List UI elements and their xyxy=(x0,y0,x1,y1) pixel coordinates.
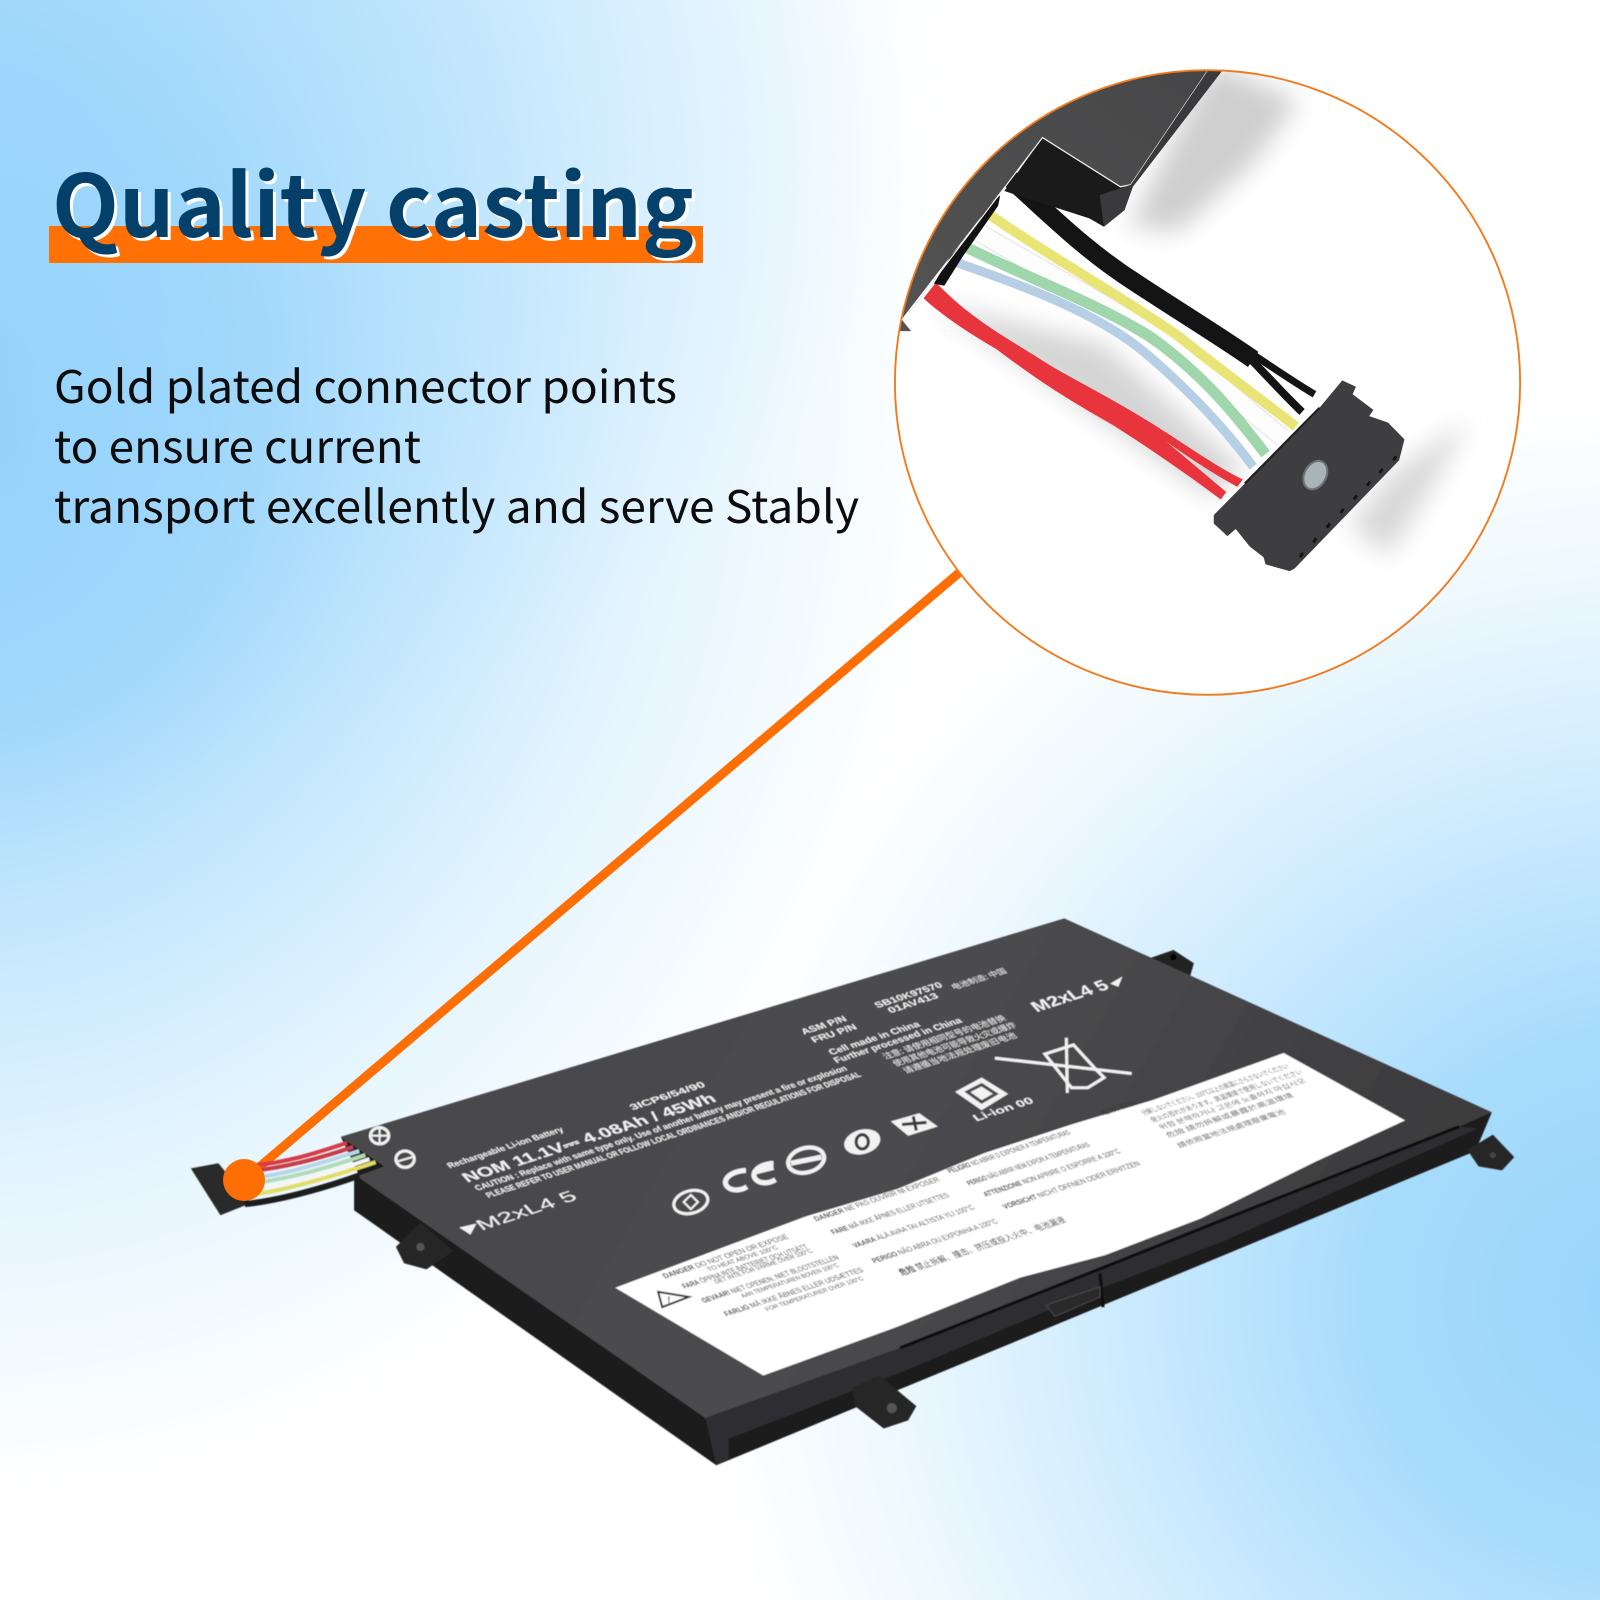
icon: round mark xyxy=(671,1187,710,1217)
description text xyxy=(54,351,859,536)
label warning text: ATTENZIONE NON APRIRE O ESPORRE A 100°C xyxy=(981,1148,1123,1199)
callout dot on connector xyxy=(223,1159,265,1201)
text on battery top: 使用其他电池可能导致火灾或爆炸 xyxy=(890,1020,1019,1069)
text on battery top: 注意: 请使用相同型号的电池替换 xyxy=(879,1013,1009,1062)
label warning text: 発火の恐れがあります。高温環境で使用しないでください xyxy=(1147,1067,1305,1124)
wires xyxy=(924,179,1315,500)
label warning text: DET INTE FÖR VÄRME ÖVER 100°C xyxy=(712,1247,814,1285)
icon: square recycling xyxy=(891,1113,938,1136)
text on battery top: M2xL4 5 xyxy=(471,1187,581,1234)
battery side wall xyxy=(354,1112,1492,1465)
connector xyxy=(1214,380,1404,571)
tab: right xyxy=(1467,1135,1514,1170)
soft photo shadows xyxy=(934,63,1469,555)
icon: CE mark xyxy=(725,1163,776,1190)
label warning text: AAN TEMPERATUREN BOVEN 100°C xyxy=(739,1262,841,1299)
label warning text: 請依照當地法規處理廢棄電池 xyxy=(1174,1107,1288,1150)
wire: blue xyxy=(948,260,1253,467)
wire: black xyxy=(1010,179,1315,412)
label warning text: 危險 請勿拆解或暴露於高溫環境 xyxy=(1163,1090,1296,1140)
description text: to ensure current xyxy=(54,411,421,476)
icon: filled badge xyxy=(841,1125,883,1158)
label warning text: VORSICHT NICHT ÖFFNEN ODER ERHITZEN xyxy=(1000,1160,1142,1211)
label warning text: 위험 분해하거나 고온에 노출하지 마십시오 xyxy=(1155,1076,1308,1131)
battery top surface xyxy=(341,918,1492,1418)
text on battery top: SB10K97570 xyxy=(872,980,945,1010)
label warning text: FARE MÅ IKKE ÅPNES ELLER UTSETTES xyxy=(828,1191,952,1236)
label warning text: 分解しないでください。100°C以上の高温にさらさないでください xyxy=(1138,1061,1291,1117)
ribbon cable xyxy=(245,1143,376,1204)
label warning text: TO HEAT ABOVE 100°C xyxy=(705,1244,780,1273)
label warning text: PELIGRO NO ABRIR O EXPONER A TEMPERATURAS xyxy=(946,1129,1073,1175)
description text: transport excellently and serve Stably xyxy=(54,471,859,536)
text on battery top: 3ICP6/54/90 xyxy=(627,1080,708,1112)
label warning text: PERIGO NÃO ABRIR NEM EXPOR A TEMPERATURAS xyxy=(964,1140,1092,1187)
title text: Quality casting xyxy=(52,137,694,262)
text on battery top: M2xL4 5 xyxy=(1026,976,1113,1015)
wire: white xyxy=(973,229,1282,437)
icon: plus terminal xyxy=(370,1128,389,1144)
text on battery top: ASM P/N xyxy=(798,1014,849,1036)
title highlight bar xyxy=(49,226,703,263)
certification symbols xyxy=(370,1038,1132,1217)
title xyxy=(49,137,703,263)
label warning text: 危険 警告 xyxy=(1097,1097,1140,1117)
tab: left xyxy=(396,1222,453,1269)
text on battery top: 01AV413 xyxy=(885,991,941,1015)
wire: red xyxy=(924,282,1243,500)
icon: recycling xyxy=(955,1078,1008,1110)
text on battery top: FRU P/N xyxy=(808,1022,859,1045)
text on battery top: Li-ion 00 xyxy=(970,1095,1037,1123)
text on battery top: CAUTION : Replace with same type only. Use of another battery may present a fire or explosion xyxy=(473,1065,850,1193)
label warning text: PERIGO NÃO ABRA OU EXPONHA A 100°C xyxy=(869,1217,1000,1265)
wire connector xyxy=(191,1163,251,1215)
label warning text: FARA ÖPPNA INTE BATTERIET OCH UTSÄTT xyxy=(680,1243,811,1291)
label warning text: 危险 禁止拆解、撞击、挤压或投入火中、电池漏液 xyxy=(895,1214,1069,1278)
wire: yellow xyxy=(986,212,1296,427)
text on battery top: 请遵循当地法规处理废旧电池 xyxy=(900,1030,1020,1076)
battery illustration xyxy=(191,918,1514,1465)
belly wrinkle and clip xyxy=(900,1127,1459,1348)
label warning text: FARLIG MÅ IKKE ÅBNES ELLER UDSÆTTES xyxy=(721,1266,866,1318)
description text: Gold plated connector points xyxy=(54,351,677,416)
text on battery top: Further processed in China xyxy=(831,1016,965,1065)
text on battery top: Cell made in China xyxy=(826,1019,923,1057)
text on battery top: NOM 11.1V⎓ 4.08Ah / 45Wh xyxy=(458,1091,720,1186)
circle outline xyxy=(895,70,1520,695)
icon: crossed out bin xyxy=(995,1038,1132,1093)
white warning label xyxy=(615,1053,1405,1375)
connector rivet xyxy=(1302,460,1328,490)
label warning text: FOR TEMPERATURER OVER 100°C xyxy=(763,1275,865,1312)
text on battery top: Rechargeable Li-ion Battery xyxy=(445,1126,567,1170)
magnified connector circle xyxy=(894,69,1522,696)
icon: minus terminal xyxy=(396,1151,414,1167)
label warning text: VAARA ÄLÄ AVAA TAI ALTISTA YLI 100°C xyxy=(850,1203,977,1250)
label warning icon: ! xyxy=(667,1295,670,1305)
battery plate xyxy=(900,71,1222,332)
orange leader line xyxy=(244,572,960,1180)
label warning text: DANGER NE PAS OUVRIR NI EXPOSER xyxy=(812,1176,942,1223)
icon: circle with bar xyxy=(785,1144,827,1177)
mounting tabs xyxy=(396,954,1514,1429)
wire: green xyxy=(961,244,1266,454)
tab: bottom xyxy=(852,1375,916,1429)
label warning text: DANGER DO NOT OPEN OR EXPOSE xyxy=(661,1233,791,1280)
text on battery top: 电池制造: 中国 xyxy=(948,966,1010,992)
label warning text: GEVAAR! NIET OPENEN, NIET BLOOTSTELLEN xyxy=(700,1254,841,1305)
text on battery top: PLEASE REFER TO USER MANUAL OR FOLLOW LOCAL ORDINANCES AND/OR REGULATIONS FOR DISPOSAL xyxy=(484,1071,864,1200)
label warning text xyxy=(661,1061,1308,1318)
tab: top xyxy=(1150,950,1194,978)
label warning icon xyxy=(658,1292,689,1307)
arrow marks xyxy=(459,977,1122,1235)
